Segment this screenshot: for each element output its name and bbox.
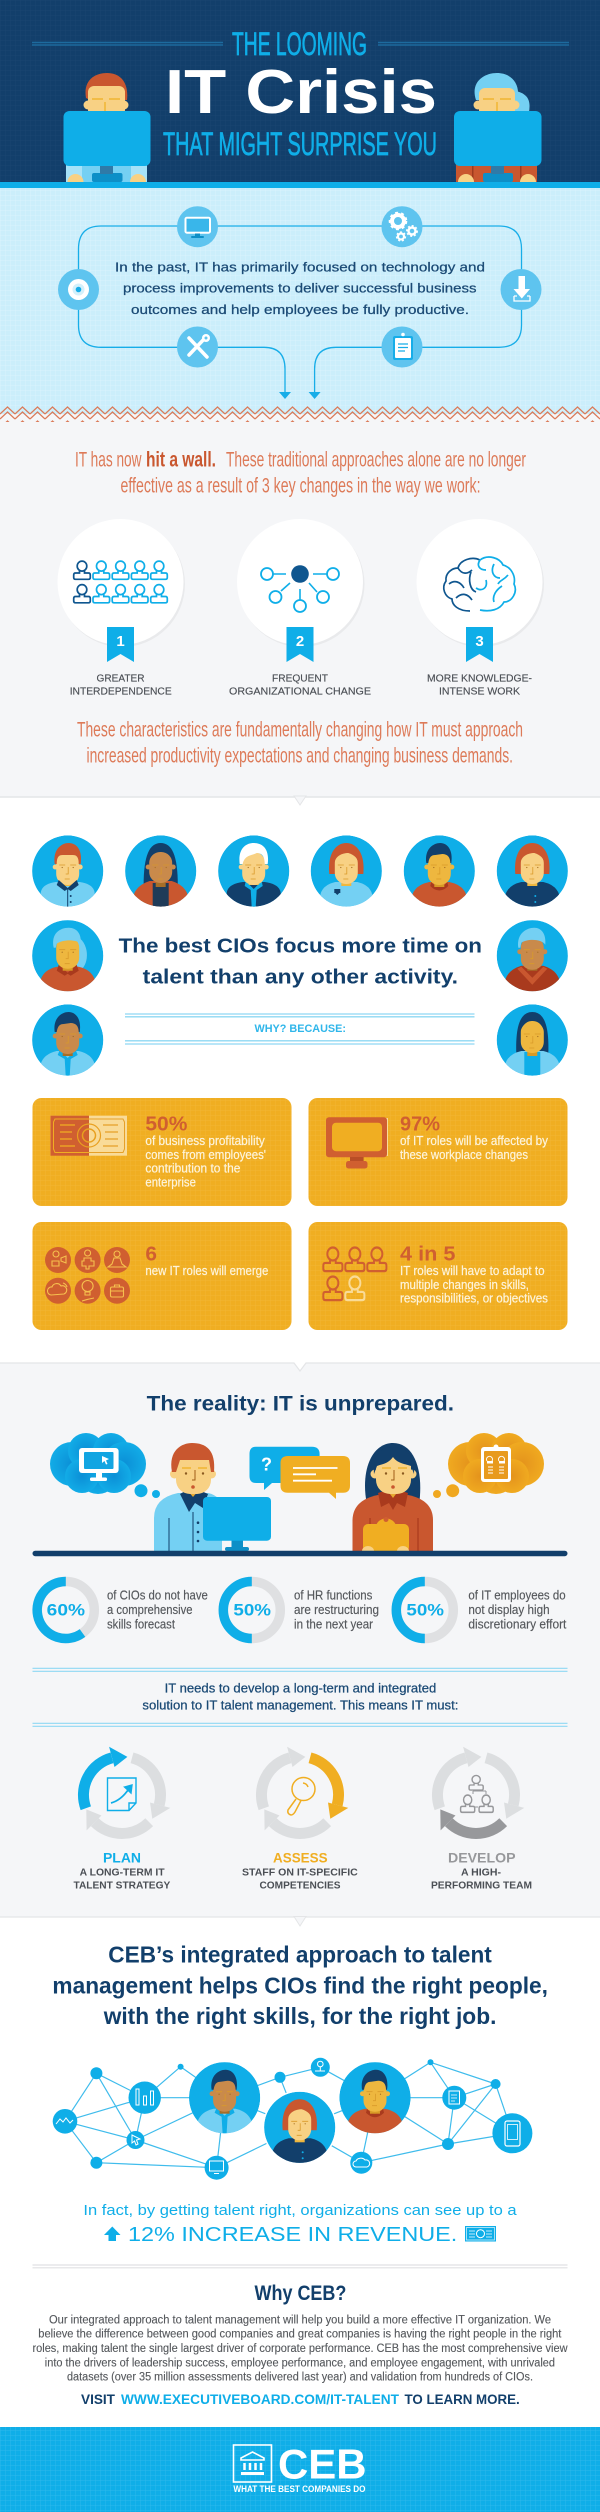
- logo mark: [234, 2445, 272, 2482]
- thought cloud: clipboard: [433, 1433, 544, 1498]
- donut 60%: [37, 1581, 94, 1638]
- avatar: man with tie: [32, 1004, 103, 1076]
- avatar: older man: [218, 835, 289, 907]
- step: develop: A HIGH-: [461, 1867, 502, 1879]
- avatar: woman in navy: [263, 2090, 337, 2164]
- node: bar chart: [128, 2082, 161, 2114]
- change 3: knowledge work: MORE KNOWLEDGE-: [427, 673, 532, 685]
- call to action: WWW.EXECUTIVEBOARD.COM/IT-TALENT: [121, 2392, 400, 2407]
- figure: woman with clipboard: [352, 1443, 433, 1552]
- stat: 50% of IT employees: of IT employees do: [468, 1588, 566, 1602]
- stat: 50% of HR: [223, 1582, 379, 1638]
- conclusion text: [77, 719, 523, 768]
- step: assess: STAFF ON IT-SPECIFIC: [242, 1867, 358, 1879]
- avatar: man in red sweater: [497, 920, 568, 992]
- avatar: woman with long dark hair: [125, 835, 196, 907]
- donut 50%: [223, 1582, 280, 1638]
- stat: 60% of CIOs: skills forecast: [107, 1618, 175, 1632]
- card: 97% of roles: [308, 1098, 568, 1206]
- change 1: interdependence: GREATER: [96, 673, 145, 685]
- card: 4 in 5 roles: 4 in 5: [400, 1244, 455, 1266]
- past focus text: process improvements to deliver successful business: [123, 281, 477, 296]
- change 3: knowledge work: [416, 519, 544, 698]
- node: document: [442, 2086, 466, 2110]
- heading: CEB approach: [52, 1942, 548, 2029]
- node: activity line: [53, 2109, 77, 2134]
- icon: gears: [382, 206, 422, 247]
- donut 50%: [396, 1582, 453, 1638]
- avatar: woman with red bob: [311, 835, 382, 907]
- avatar: man with red hair: [32, 835, 103, 907]
- icon: monitor: [177, 206, 218, 247]
- arrowheads: [279, 392, 321, 399]
- people icon: [74, 561, 167, 603]
- icon: banknote: [465, 2226, 496, 2242]
- stat: 50% of IT employees: [396, 1582, 567, 1638]
- change 3: knowledge work: INTENSE WORK: [439, 686, 520, 698]
- panel: header: [0, 0, 600, 183]
- title: that might surprise you: THAT MIGHT SURPRISE YOU: [163, 126, 437, 162]
- call to action: VISIT: [81, 2392, 116, 2407]
- about paragraph: roles, making talent the single largest driver of corporate performance. CEB has the most comprehensive view: [32, 2343, 568, 2355]
- icon: five people, four highlighted: [323, 1247, 386, 1300]
- node: cloud: [350, 2152, 372, 2174]
- cycle arrows: [83, 1747, 170, 1833]
- card: 50% profitability: enterprise: [145, 1176, 196, 1190]
- speech bubbles: ?: [261, 1455, 272, 1475]
- tagline: WHAT THE BEST COMPANIES DO: [233, 2484, 366, 2495]
- brain icon: [444, 557, 515, 611]
- panel: hit a wall: [0, 422, 600, 797]
- heading: the reality: The reality: IT is unprepared.: [147, 1393, 454, 1416]
- icon: tools: [177, 326, 218, 368]
- long-term solution text: [142, 1680, 458, 1712]
- icon: disc: [58, 269, 99, 310]
- card: 50% profitability: [32, 1098, 292, 1206]
- avatar: woman with long navy hair: [497, 1004, 568, 1076]
- card: 4 in 5 roles: responsibilities, or objectives: [400, 1292, 548, 1306]
- ribbon 2: [286, 627, 314, 662]
- about paragraph: believe the difference between good companies and great companies is having the right people in the right: [38, 2329, 562, 2341]
- call to action: TO LEARN MORE.: [404, 2392, 520, 2407]
- intro text: [75, 449, 526, 498]
- panel: footer: [0, 2427, 600, 2512]
- step: plan: PLAN: [103, 1850, 141, 1865]
- stat: 50% of HR: in the next year: [294, 1618, 373, 1632]
- card: 6 new roles: [32, 1222, 292, 1330]
- stat: 50% of IT employees: discretionary effort: [468, 1618, 567, 1632]
- card: 4 in 5 roles: [308, 1222, 568, 1330]
- step: plan: TALENT STRATEGY: [74, 1879, 170, 1891]
- ribbon 1: [107, 627, 134, 662]
- heading: CEB approach: CEB’s integrated approach to talent: [108, 1942, 492, 1968]
- past focus text: In the past, IT has primarily focused on technology and: [115, 260, 485, 275]
- step: develop: DEVELOP: [448, 1850, 516, 1865]
- panel: best CIOs: [0, 796, 600, 1363]
- step: assess: ASSESS: [273, 1850, 328, 1865]
- thought cloud: monitor: [50, 1433, 160, 1498]
- revenue statement: [83, 2202, 517, 2246]
- icon: up arrow: [104, 2226, 120, 2241]
- change 2: organizational change: [229, 519, 371, 698]
- icon: growth document: [108, 1778, 136, 1810]
- about paragraph: Our integrated approach to talent management will help you build a more effective IT organization. We: [49, 2314, 551, 2326]
- step: plan: [74, 1747, 170, 1891]
- stat: 50% of HR: 50%: [233, 1601, 271, 1620]
- avatar: man in orange sweater: [404, 835, 475, 907]
- icon: download: [500, 269, 542, 310]
- intro text: IT has now: [75, 449, 142, 472]
- card: 6 new roles: 6: [145, 1244, 157, 1266]
- stat: 50% of HR: are restructuring: [294, 1603, 379, 1617]
- card: 6 new roles: new IT roles will emerge: [145, 1264, 268, 1278]
- heading: best CIOs: talent than any other activity.: [143, 965, 458, 988]
- heading: why CEB: Why CEB?: [254, 2282, 346, 2305]
- intro text: hit a wall.: [146, 449, 216, 472]
- figure: man at computer: [154, 1443, 271, 1551]
- logo wordmark: CEB: [278, 2441, 367, 2488]
- step: assess: [242, 1747, 358, 1891]
- node: cursor: [126, 2131, 144, 2149]
- avatar: woman in navy: [497, 835, 568, 907]
- card: 97% of roles: these workplace changes: [400, 1148, 528, 1162]
- step: plan: A LONG-TERM IT: [80, 1867, 165, 1879]
- card: 50% profitability: comes from employees': [145, 1148, 266, 1162]
- why because label: WHY? BECAUSE:: [254, 1023, 346, 1035]
- call to action: [81, 2392, 520, 2407]
- title: the looming: THE LOOMING: [232, 26, 367, 62]
- icons: six role badges: [45, 1247, 130, 1304]
- stat: 60% of CIOs: 60%: [47, 1601, 85, 1620]
- network icon: [261, 565, 339, 612]
- change 2: organizational change: FREQUENT: [272, 673, 329, 685]
- change 2: organizational change: 2: [296, 633, 304, 650]
- icon: banknote: [50, 1116, 127, 1156]
- stat: 50% of IT employees: 50%: [406, 1601, 444, 1620]
- heading: best CIOs: The best CIOs focus more time on: [119, 935, 482, 958]
- speech bubbles: [250, 1447, 350, 1499]
- past focus text: outcomes and help employees be fully productive.: [131, 302, 469, 317]
- change 2: organizational change: ORGANIZATIONAL CHANGE: [229, 686, 371, 698]
- figure: man at laptop: [64, 73, 150, 182]
- cycle arrows: [261, 1747, 348, 1833]
- step: assess: COMPETENCIES: [260, 1879, 340, 1891]
- card: 50% profitability: contribution to the: [145, 1162, 240, 1176]
- panel: CEB approach: [0, 1916, 600, 2427]
- desk: [32, 1551, 568, 1556]
- long-term solution text: solution to IT talent management. This means IT must:: [142, 1697, 458, 1712]
- stat: 60% of CIOs: a comprehensive: [107, 1603, 193, 1617]
- heading: CEB approach: management helps CIOs find the right people,: [52, 1972, 548, 1998]
- stat: 50% of IT employees: not display high: [468, 1603, 550, 1617]
- past focus text: [115, 260, 485, 317]
- change 1: interdependence: [58, 519, 185, 698]
- change 1: interdependence: 1: [116, 633, 125, 650]
- cycle arrows: [437, 1747, 524, 1833]
- card: 50% profitability: of business profitability: [145, 1134, 266, 1148]
- stat: 50% of HR: of HR functions: [294, 1588, 372, 1602]
- about paragraph: [32, 2314, 568, 2384]
- step: develop: [431, 1747, 532, 1891]
- icon: clipboard: [382, 326, 422, 368]
- avatar: man with tie: [189, 2062, 260, 2134]
- node: monitor: [205, 2156, 229, 2180]
- icon: magnifying glass: [288, 1778, 315, 1815]
- title: IT Crisis: IT Crisis: [165, 58, 437, 127]
- about paragraph: into the drivers of leadership success, employee performance, and employee engagement, with unrivaled: [45, 2357, 555, 2369]
- process loop arrows: [78, 226, 522, 392]
- stat: 60% of CIOs: [37, 1581, 208, 1638]
- card: 97% of roles: 97%: [400, 1114, 440, 1136]
- icon: monitor: [326, 1117, 388, 1168]
- card: 4 in 5 roles: IT roles will have to adapt to: [400, 1264, 545, 1278]
- talent network diagram: [53, 2058, 532, 2180]
- revenue statement: In fact, by getting talent right, organizations can see up to a: [83, 2202, 517, 2219]
- icon: team hierarchy: [461, 1775, 493, 1812]
- avatar: woman with blue hair: [32, 920, 103, 992]
- step: develop: PERFORMING TEAM: [431, 1879, 532, 1891]
- revenue statement: 12% INCREASE IN REVENUE.: [128, 2224, 457, 2246]
- long-term solution text: IT needs to develop a long-term and integrated: [165, 1680, 436, 1695]
- heading: CEB approach: with the right skills, for the right job.: [103, 2003, 496, 2029]
- card: 50% profitability: 50%: [145, 1114, 188, 1136]
- change 1: interdependence: INTERDEPENDENCE: [70, 686, 172, 698]
- about paragraph: datasets (over 35 million assessments delivered last year) and validation from hundreds of CIOs.: [67, 2372, 533, 2384]
- avatar: man in orange sweater: [339, 2062, 411, 2134]
- node: location pin: [311, 2058, 330, 2077]
- stat: 60% of CIOs: of CIOs do not have: [107, 1588, 208, 1602]
- ribbon 3: [466, 627, 493, 662]
- panel: the reality: [0, 1363, 600, 1917]
- heading: best CIOs: [119, 935, 482, 988]
- card: 4 in 5 roles: multiple changes in skills,: [400, 1278, 529, 1292]
- card: 97% of roles: of IT roles will be affected by: [400, 1134, 549, 1148]
- figure: woman at laptop: [454, 73, 542, 182]
- node: phone: [492, 2113, 532, 2153]
- panel: past focus: [0, 182, 600, 422]
- change 3: knowledge work: 3: [475, 633, 484, 650]
